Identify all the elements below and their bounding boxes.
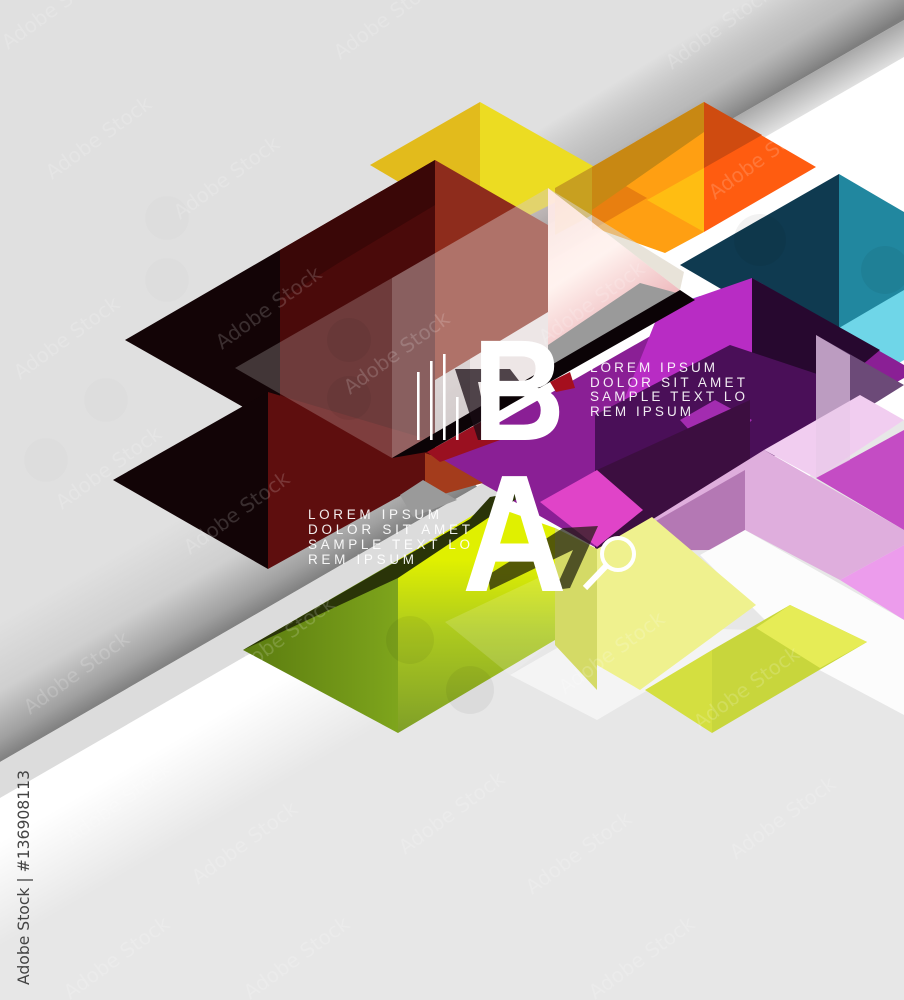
watermarks: Adobe Stock (224, 591, 339, 684)
watermarks: Adobe Stock (187, 796, 302, 889)
watermarks: Adobe Stock (169, 131, 284, 224)
watermarks: Adobe Stock (339, 306, 454, 399)
icon: bar chart lines (417, 354, 459, 440)
watermarks: Adobe Stock (9, 291, 124, 384)
shape: brown and gray wedges beneath red diamonds (400, 453, 483, 517)
shape: purple diamond (437, 278, 904, 552)
text block: left lorem ipsum: LOREM IPSUM (308, 507, 439, 522)
letter B: B (472, 310, 565, 471)
watermarks: Adobe Stock (534, 256, 649, 349)
watermarks: Adobe Stock (211, 261, 326, 354)
watermarks: Adobe Stock (725, 771, 840, 864)
shape: teal diamond (680, 174, 904, 380)
watermarks: Adobe Stock (51, 421, 166, 514)
watermarks: Adobe Stock (554, 606, 669, 699)
text block: right lorem ipsum: REM IPSUM (590, 404, 691, 419)
shape: orange diamond (555, 102, 816, 253)
text block: left lorem ipsum (308, 507, 470, 567)
text block: right lorem ipsum: DOLOR SIT AMET (590, 375, 745, 390)
text block: left lorem ipsum: DOLOR SIT AMET (308, 522, 470, 537)
watermarks: Adobe Stock (179, 466, 294, 559)
subtle circle pattern (24, 196, 904, 714)
shape: yellow diamond (370, 102, 600, 240)
dark diagonal stripe with red edge (392, 290, 695, 462)
shape: pale pink and white panels on the right (600, 335, 904, 715)
text block: right lorem ipsum: SAMPLE TEXT LO (590, 389, 745, 404)
watermarks: Adobe Stock (689, 641, 804, 734)
watermarks: Adobe Stock (61, 756, 176, 849)
dark chevron behind letter A (488, 526, 598, 590)
shape: pink wedge beside letter A (540, 470, 643, 547)
shape: green diamond (243, 490, 597, 733)
watermarks: Adobe Stock (394, 766, 509, 859)
shape: translucent white diamond (235, 188, 684, 458)
text block: right lorem ipsum (590, 360, 745, 419)
shape: pale yellow diamond (445, 517, 867, 733)
icon: magnifier (585, 538, 634, 588)
watermarks: Adobe Stock (521, 806, 636, 899)
watermarks: Adobe Stock (19, 626, 134, 719)
side credit text: Adobe Stock | #136908113 (14, 770, 33, 985)
watermarks: Adobe Stock (41, 91, 156, 184)
text block: left lorem ipsum: REM IPSUM (308, 552, 414, 567)
shape: lower dark red diamond (113, 392, 430, 569)
text block: right lorem ipsum: LOREM IPSUM (590, 360, 715, 375)
shape: upper dark red diamond (125, 160, 548, 480)
text block: left lorem ipsum: SAMPLE TEXT LO (308, 537, 470, 552)
dark chevron behind letter B (455, 369, 520, 440)
letter A: A (462, 441, 567, 627)
watermarks: Adobe Stock (704, 111, 819, 204)
